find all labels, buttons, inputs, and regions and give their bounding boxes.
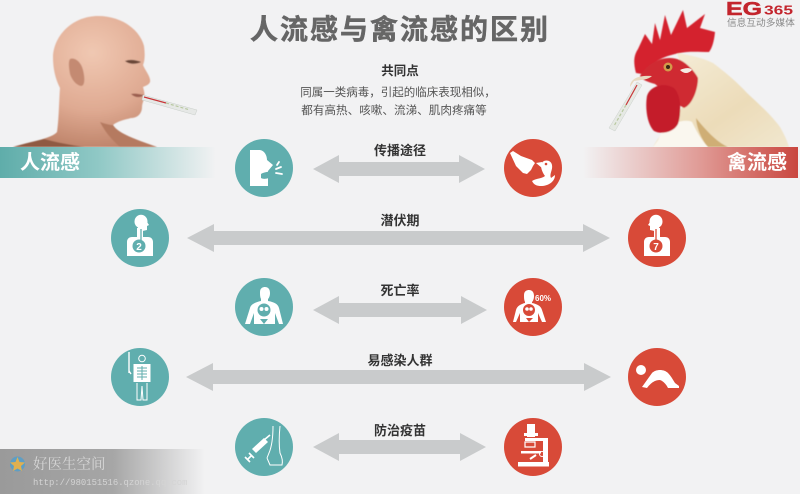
face	[640, 58, 698, 108]
banner: human flu: 人流感	[20, 151, 80, 174]
row: susceptible population	[111, 348, 686, 406]
banner: avian flu	[583, 147, 798, 178]
icon: skull on torso with 60%: 60%	[535, 294, 551, 303]
row: mortality	[235, 278, 562, 336]
arrow	[313, 155, 485, 183]
watermark: 好医生空间	[33, 455, 106, 473]
label: 传播途径	[374, 143, 426, 158]
beak	[630, 76, 652, 87]
logo: EG365: 信息互动多媒体	[727, 16, 795, 29]
comb	[634, 10, 715, 74]
label: 防治疫苗	[374, 423, 426, 438]
row: incubation period	[111, 209, 686, 267]
arrow	[186, 363, 611, 391]
icon: coughing person	[235, 139, 293, 197]
label: 易感染人群	[367, 353, 433, 368]
thermometer	[609, 82, 642, 131]
icon: hand and duck	[504, 139, 562, 197]
icon: respiratory tract, 2 days	[111, 209, 169, 267]
icon: x-ray examination	[111, 348, 169, 406]
thermometer	[142, 95, 197, 115]
label: 死亡率	[380, 283, 420, 298]
illustration: rooster with thermometer	[609, 10, 789, 147]
icon: respiratory tract, 2 days: 2	[136, 242, 142, 253]
wattle	[646, 85, 680, 133]
logo: EG365: 365	[764, 2, 793, 18]
text block: common points: 共同点	[381, 63, 419, 78]
icon: skull on torso with 60%	[504, 278, 562, 336]
icon: collapsed person	[628, 348, 686, 406]
icon: syringe and arm	[235, 418, 293, 476]
text block: common points: 都有高热、咳嗽、流涕、肌肉疼痛等	[301, 103, 487, 117]
icon: respiratory tract, 7 days: 7	[653, 242, 659, 253]
watermark	[0, 449, 205, 494]
banner: human flu	[0, 147, 216, 178]
row: prevention and vaccine	[235, 418, 562, 476]
arrow	[313, 433, 486, 461]
logo: EG365	[726, 0, 795, 29]
icon: star badge	[10, 456, 25, 472]
title: 人流感与禽流感的区别	[250, 14, 550, 45]
banner: avian flu: 禽流感	[727, 151, 787, 174]
illustration: man with thermometer	[13, 16, 197, 147]
row: transmission route	[235, 139, 562, 197]
label: 潜伏期	[380, 213, 420, 228]
icon: microscope	[504, 418, 562, 476]
text block: common points: 同属一类病毒，引起的临床表现相似，	[300, 85, 496, 99]
icon: respiratory tract, 7 days	[628, 209, 686, 267]
watermark: http://980151516.qzone.qq.com	[33, 478, 187, 488]
arrow	[313, 296, 487, 324]
arrow	[187, 224, 610, 252]
eye	[664, 62, 672, 72]
icon: skull on torso	[235, 278, 293, 336]
text block: common points	[300, 63, 496, 117]
